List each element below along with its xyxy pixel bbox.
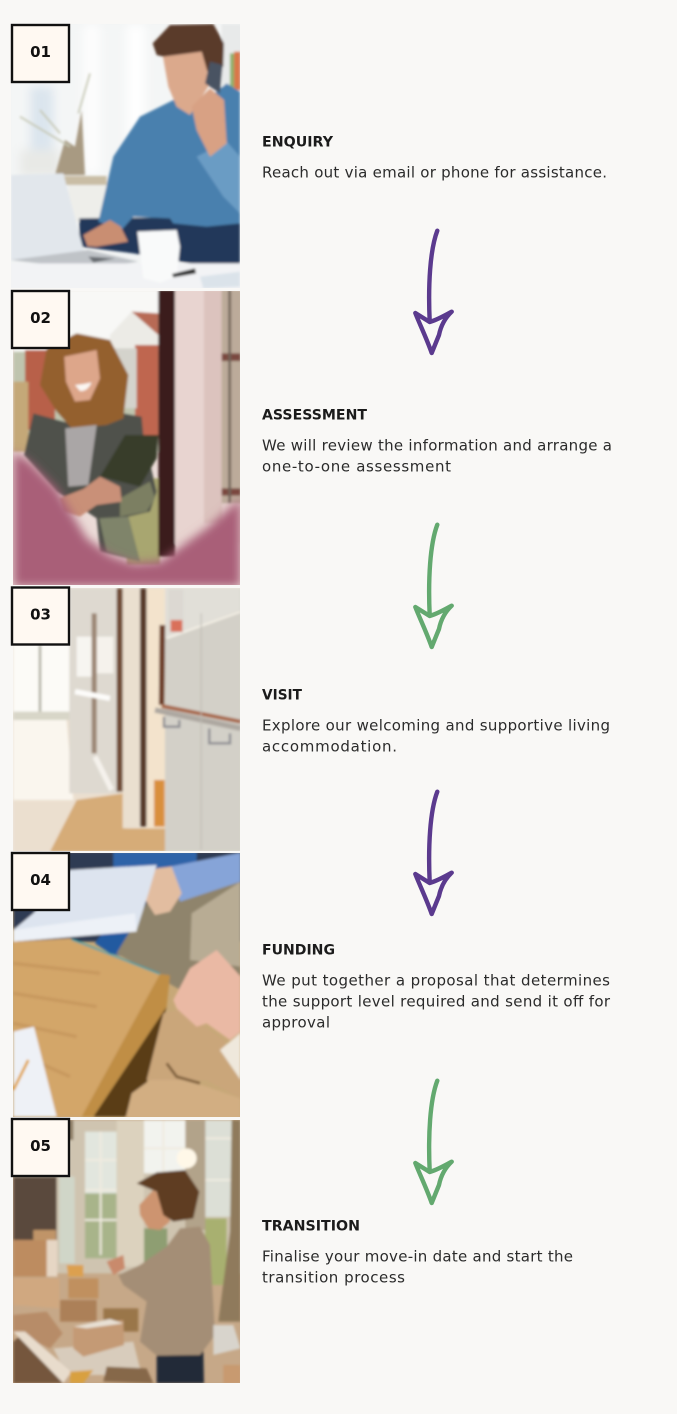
text block: assessment: one-to-one assessment bbox=[262, 458, 451, 476]
text block: visit: VISIT bbox=[262, 688, 302, 704]
photo 2: smiling woman at the door bbox=[13, 290, 242, 587]
photo 1: man on phone at laptop bbox=[11, 24, 242, 290]
text block: assessment: We will review the information and arrange a bbox=[262, 436, 612, 454]
text block: enquiry: ENQUIRY bbox=[262, 134, 333, 150]
step badge 04 bbox=[12, 853, 69, 910]
text block: funding: We put together a proposal that determines bbox=[262, 972, 610, 990]
arrow: green, funding to transition bbox=[415, 1081, 452, 1203]
step badge 02 bbox=[12, 291, 69, 348]
arrow: purple, visit to funding bbox=[415, 792, 452, 914]
step badge 05: 05 bbox=[30, 1137, 51, 1155]
text block: assessment: ASSESSMENT bbox=[262, 408, 367, 424]
text block: transition bbox=[262, 1218, 573, 1286]
text block: visit: accommodation. bbox=[262, 738, 397, 756]
text block: funding: approval bbox=[262, 1014, 330, 1032]
text block: funding bbox=[262, 942, 611, 1032]
text block: visit bbox=[262, 688, 610, 756]
text block: assessment bbox=[262, 408, 612, 476]
text block: enquiry: Reach out via email or phone for assistance. bbox=[262, 164, 607, 182]
step badge 05 bbox=[12, 1119, 69, 1176]
text block: transition: TRANSITION bbox=[262, 1218, 360, 1234]
step badge 01: 01 bbox=[30, 43, 51, 61]
step badge 01 bbox=[12, 25, 69, 82]
text block: enquiry bbox=[262, 134, 607, 182]
step badge 04: 04 bbox=[30, 871, 51, 889]
photo 4: paperwork handover across a table bbox=[13, 852, 242, 1118]
photo 5: woman unpacking boxes by a window bbox=[13, 1120, 242, 1383]
text block: funding: the support level required and send it off for bbox=[262, 992, 611, 1010]
text block: funding: FUNDING bbox=[262, 942, 335, 958]
step badge 03 bbox=[12, 588, 69, 644]
text block: transition: Finalise your move-in date and start the bbox=[262, 1248, 573, 1266]
arrow: green, assessment to visit bbox=[415, 525, 452, 647]
photo 3: corridor with handrail bbox=[13, 588, 242, 852]
text block: transition: transition process bbox=[262, 1268, 405, 1286]
arrow: purple, enquiry to assessment bbox=[415, 231, 452, 353]
step badge 02: 02 bbox=[30, 309, 51, 327]
text block: visit: Explore our welcoming and supportive living bbox=[262, 716, 610, 734]
step badge 03: 03 bbox=[30, 606, 51, 624]
